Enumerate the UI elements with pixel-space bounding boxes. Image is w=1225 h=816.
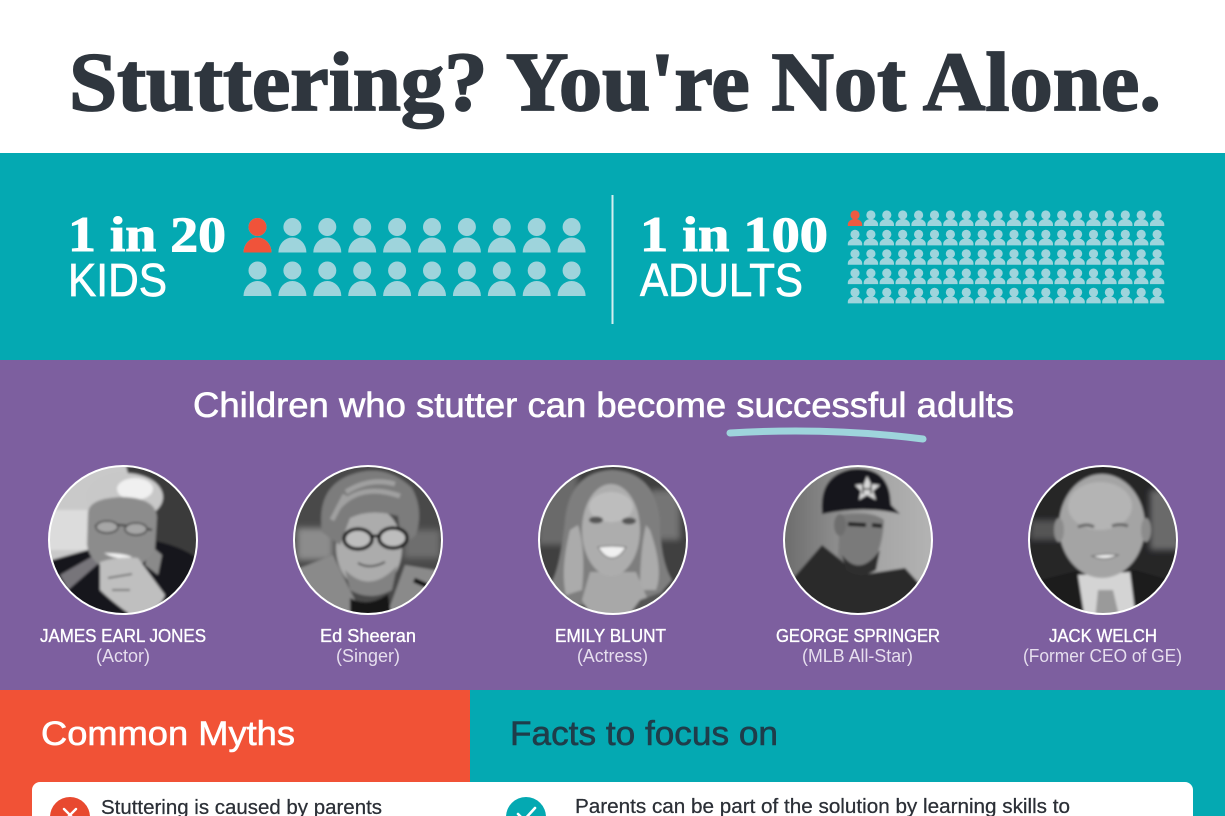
stat: 1 in 100 adults: 1 in 100 <box>640 206 828 262</box>
caption: Emily Blunt <box>555 626 666 666</box>
underline swoosh <box>730 431 923 439</box>
caption: George Springer: GEORGE SPRINGER <box>776 626 940 646</box>
icon: myth cross <box>50 797 90 816</box>
title: Stuttering? You're Not Alone. <box>69 36 1161 129</box>
portrait: Emily Blunt <box>535 462 691 620</box>
icon grid: 20 kids, one highlighted <box>244 218 586 296</box>
caption: Ed Sheeran <box>320 626 416 666</box>
portrait: Ed Sheeran <box>290 462 446 620</box>
portrait: Jack Welch <box>1025 462 1181 620</box>
portrait: James Earl Jones <box>45 462 201 620</box>
panel: facts header: Facts to focus on <box>510 715 778 753</box>
stat: 1 in 100 adults <box>640 206 828 306</box>
caption: Jack Welch <box>1023 626 1182 666</box>
panel: common myths header <box>0 690 470 816</box>
stat: 1 in 20 kids: KIDS <box>68 254 167 306</box>
portrait: George Springer <box>780 462 936 620</box>
caption: Jack Welch: (Former CEO of GE) <box>1023 646 1182 666</box>
caption: James Earl Jones: (Actor) <box>96 646 150 666</box>
stat: 1 in 20 kids <box>68 206 226 306</box>
caption: Emily Blunt: (Actress) <box>577 646 648 666</box>
title <box>0 0 1225 153</box>
caption: Jack Welch: JACK WELCH <box>1049 626 1157 646</box>
panel: successful adults <box>0 360 1225 690</box>
panel: common myths header: Common Myths <box>41 715 295 753</box>
icon: fact check <box>506 797 546 816</box>
caption: George Springer <box>776 626 940 666</box>
stat: 1 in 100 adults: ADULTS <box>640 254 803 306</box>
caption: George Springer: (MLB All-Star) <box>802 646 913 666</box>
stat: 1 in 20 kids: 1 in 20 <box>68 206 226 262</box>
panel: prevalence statistics <box>0 153 1225 360</box>
caption: Ed Sheeran: (Singer) <box>336 646 400 666</box>
heading: Children who stutter can become successful adults <box>193 386 1014 425</box>
caption: James Earl Jones: JAMES EARL JONES <box>40 626 206 646</box>
panel: facts header <box>470 690 1225 816</box>
caption: James Earl Jones <box>40 626 206 666</box>
icon grid: 100 adults, one highlighted <box>846 208 1164 303</box>
caption: Ed Sheeran: Ed Sheeran <box>320 626 416 646</box>
card: myths and facts <box>32 782 1193 816</box>
caption: Emily Blunt: EMILY BLUNT <box>555 626 666 646</box>
